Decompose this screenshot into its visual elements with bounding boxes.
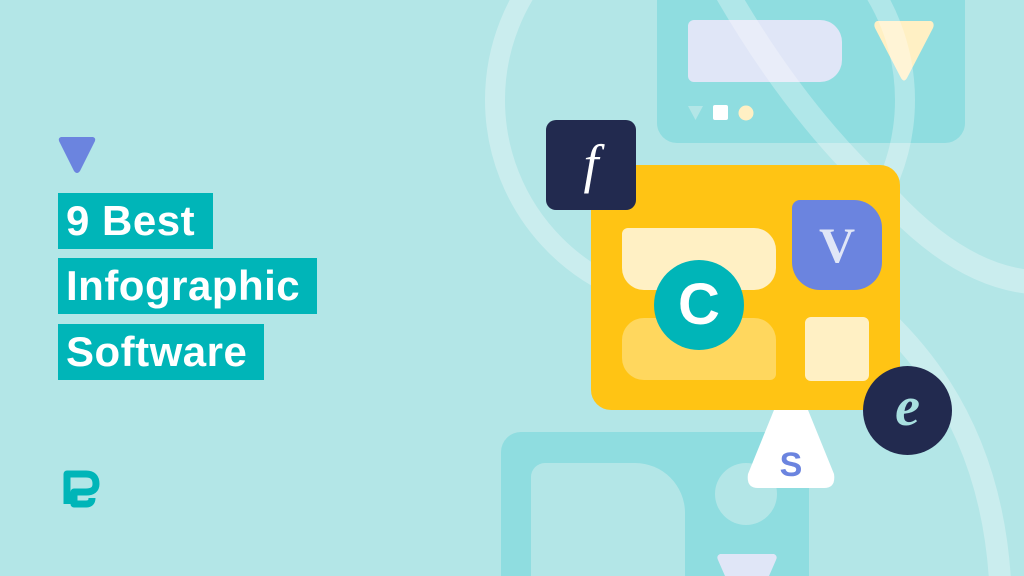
V badge: V: [819, 217, 855, 273]
pill shape: [688, 20, 842, 82]
title: Infographic: [66, 262, 300, 309]
inner rectangle: [531, 463, 685, 576]
panel: yellow main card: [591, 165, 900, 410]
title: [58, 193, 317, 380]
V badge: [792, 200, 882, 290]
icon: C circle: [654, 260, 744, 350]
icon: f square: f: [583, 134, 598, 194]
title: 9 Best: [66, 197, 195, 244]
light pill: [622, 228, 776, 290]
icon: S triangle: S: [780, 446, 802, 484]
small icons row: [688, 105, 754, 120]
icon: f square: [546, 120, 636, 210]
icon: C circle: C: [678, 272, 720, 337]
title: Software: [66, 328, 247, 375]
lavender trapezoid: [717, 554, 777, 576]
icon: S triangle: [748, 410, 834, 488]
icon: e circle: e: [895, 376, 920, 438]
light square: [805, 317, 869, 381]
icon: logo: [64, 470, 100, 508]
icon: blue triangle: [58, 137, 96, 173]
darker pill: [622, 318, 776, 380]
panel: top background card: [657, 0, 965, 143]
inner circle: [715, 463, 777, 525]
triangle shape: [874, 21, 934, 80]
icon: e circle: [863, 366, 952, 455]
panel: bottom background card: [501, 432, 809, 576]
